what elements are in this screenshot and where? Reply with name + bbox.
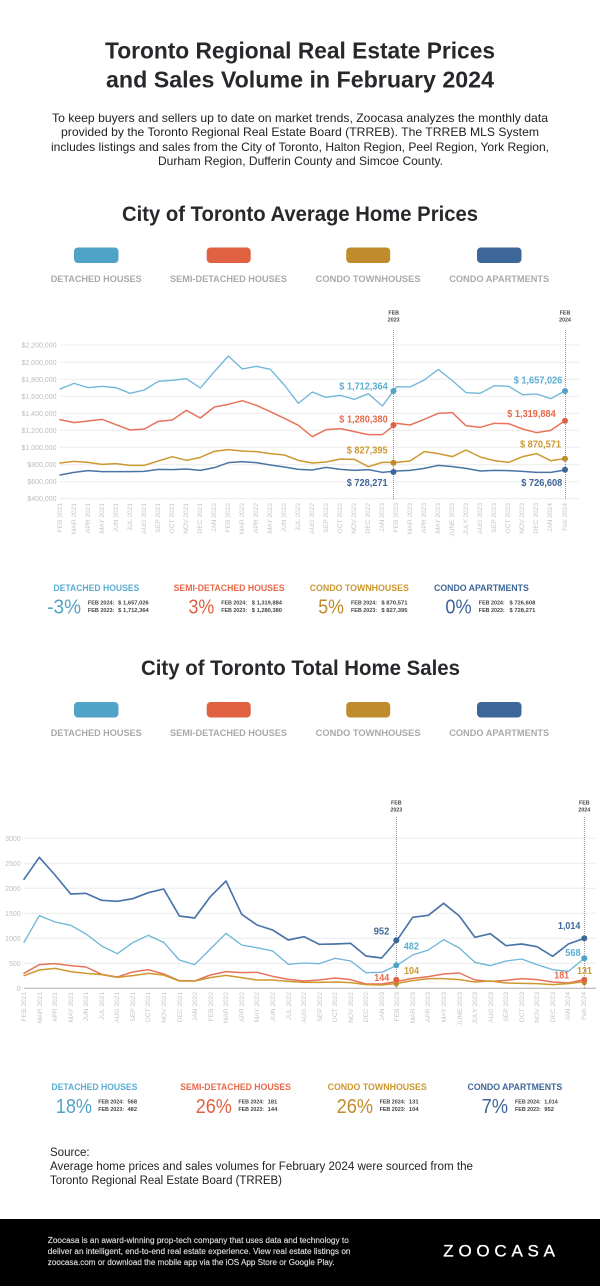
reference markers: FEB bbox=[391, 800, 402, 806]
stat: detached houses: 482 bbox=[128, 1107, 137, 1113]
stat: detached houses: -3% bbox=[47, 597, 81, 619]
stat: detached houses bbox=[51, 1082, 137, 1118]
value labels: $ 728,271 bbox=[347, 478, 388, 489]
x axis labels: JUN 2022 bbox=[281, 503, 288, 532]
stat: condo apartments: $ 726,608 bbox=[510, 600, 535, 606]
x axis labels: DEC 2021 bbox=[197, 503, 204, 533]
x axis labels: SEP 2022 bbox=[323, 503, 330, 533]
heading: average home prices: City of Toronto Average Home Prices bbox=[122, 203, 478, 226]
y axis labels: $800,000 bbox=[27, 462, 57, 469]
x axis labels: APR 2022 bbox=[239, 992, 246, 1022]
stat: semi-detached houses: SEMI-DETACHED HOUSES bbox=[174, 583, 285, 594]
x axis labels bbox=[57, 503, 569, 537]
legend: total home sales bbox=[51, 702, 549, 739]
reference markers: FEB bbox=[579, 800, 590, 806]
legend: average home prices: CONDO APARTMENTS bbox=[449, 274, 549, 285]
x axis labels: MAR 2023 bbox=[410, 992, 417, 1023]
data lines bbox=[24, 857, 584, 985]
title: and Sales Volume in February 2024 bbox=[106, 66, 494, 92]
y axis labels: 2000 bbox=[5, 886, 21, 893]
intro paragraph bbox=[51, 111, 549, 168]
x axis labels: OCT 2023 bbox=[505, 503, 512, 533]
x axis labels: NOV 2021 bbox=[183, 503, 190, 534]
legend: total home sales: CONDO TOWNHOUSES bbox=[316, 728, 421, 739]
stat: condo apartments: CONDO APARTMENTS bbox=[434, 583, 529, 594]
stat: detached houses: 18% bbox=[56, 1096, 92, 1118]
x axis labels: JAN 2022 bbox=[211, 503, 218, 532]
stat: condo townhouses: $ 870,571 bbox=[381, 600, 408, 606]
x axis labels: APR 2023 bbox=[425, 992, 432, 1022]
stat: semi-detached houses: $ 1,319,884 bbox=[252, 600, 283, 606]
x axis labels: JAN 2022 bbox=[192, 992, 199, 1021]
footer text: deliver an intelligent, end-to-end real estate experience. View real estate listings on bbox=[48, 1247, 351, 1256]
stat: condo townhouses: $ 827,395 bbox=[381, 608, 408, 614]
x axis labels: SEP 2023 bbox=[491, 503, 498, 533]
reference markers bbox=[390, 800, 590, 988]
x axis labels: SEP 2021 bbox=[130, 992, 137, 1022]
stat: condo townhouses bbox=[328, 1082, 427, 1118]
reference markers: 2024 bbox=[578, 808, 590, 814]
intro paragraph: provided by the Toronto Regional Real Estate Board (TRREB). The TRREB MLS System bbox=[61, 125, 539, 139]
value labels: $ 1,657,026 bbox=[514, 375, 563, 386]
footer text: Zoocasa is an award-winning prop-tech company that uses data and technology to bbox=[48, 1236, 349, 1245]
stat: semi-detached houses: 144 bbox=[268, 1107, 278, 1113]
y axis labels: $1,600,000 bbox=[21, 394, 57, 401]
x axis labels: NOV 2023 bbox=[519, 503, 526, 534]
legend: total home sales: CONDO APARTMENTS bbox=[449, 728, 549, 739]
x axis labels: MAY 2022 bbox=[254, 992, 261, 1022]
x axis labels: DEC 2021 bbox=[177, 992, 184, 1022]
y axis labels: $1,800,000 bbox=[21, 377, 57, 384]
x axis labels: FEB 2022 bbox=[208, 992, 215, 1021]
x axis labels: DEC 2023 bbox=[533, 503, 540, 533]
x axis labels bbox=[21, 992, 588, 1026]
data points bbox=[393, 935, 587, 987]
stat: condo apartments: FEB 2023: bbox=[479, 608, 505, 614]
value labels: $ 726,608 bbox=[521, 478, 563, 489]
x axis labels: NOV 2023 bbox=[534, 992, 541, 1023]
stat: semi-detached houses: FEB 2023: bbox=[238, 1107, 264, 1113]
intro paragraph: To keep buyers and sellers up to date on market trends, Zoocasa analyzes the monthly data bbox=[52, 111, 548, 125]
x axis labels: FEB 2021 bbox=[57, 503, 64, 532]
x axis labels: AUG 2022 bbox=[309, 503, 316, 534]
value labels: 144 bbox=[374, 973, 390, 984]
value labels: $ 827,395 bbox=[347, 445, 388, 456]
x axis labels: OCT 2021 bbox=[145, 992, 152, 1022]
stat: semi-detached houses: 26% bbox=[196, 1096, 232, 1118]
footer bbox=[0, 1219, 600, 1286]
stat: detached houses: FEB 2023: bbox=[88, 608, 115, 614]
stat: detached houses: DETACHED HOUSES bbox=[53, 583, 139, 594]
y axis labels: $1,400,000 bbox=[21, 411, 57, 418]
x axis labels: APR 2023 bbox=[421, 503, 428, 533]
intro paragraph: includes listings and sales from the City of Toronto, Halton Region, Peel Region, York Region, bbox=[51, 140, 549, 154]
value labels: 181 bbox=[554, 971, 569, 982]
stat: semi-detached houses: SEMI-DETACHED HOUSES bbox=[180, 1082, 291, 1093]
y axis labels: 0 bbox=[17, 986, 21, 993]
value labels: 568 bbox=[565, 948, 581, 959]
x axis labels: NOV 2022 bbox=[351, 503, 358, 534]
x axis labels: MAR 2022 bbox=[239, 503, 246, 534]
x axis labels: DEC 2022 bbox=[363, 992, 370, 1022]
stat: detached houses: $ 1,657,026 bbox=[118, 600, 149, 606]
stat: condo townhouses: 131 bbox=[409, 1100, 419, 1106]
x axis labels: FEB 2021 bbox=[21, 992, 28, 1021]
stat: condo townhouses: 26% bbox=[337, 1096, 373, 1118]
x axis labels: APR 2022 bbox=[253, 503, 260, 533]
x axis labels: MAR 2021 bbox=[37, 992, 44, 1023]
x axis labels: JUL 2021 bbox=[127, 503, 134, 531]
x axis labels: JUNE 2023 bbox=[449, 503, 456, 537]
x axis labels: JUL 2022 bbox=[295, 503, 302, 531]
y axis labels: $400,000 bbox=[27, 496, 57, 503]
y axis labels: 500 bbox=[9, 961, 21, 968]
x axis labels: OCT 2022 bbox=[337, 503, 344, 533]
footer text: zoocasa.com or download the mobile app via the iOS App Store or Google Play. bbox=[48, 1258, 335, 1267]
data lines bbox=[60, 356, 565, 475]
x axis labels: AUG 2023 bbox=[488, 992, 495, 1023]
y axis labels bbox=[5, 836, 21, 993]
x axis labels: SEP 2021 bbox=[155, 503, 162, 533]
stat: condo apartments bbox=[434, 583, 535, 619]
value labels: $ 1,280,380 bbox=[339, 415, 388, 426]
x axis labels: JULY 2023 bbox=[463, 503, 470, 535]
stats: total home sales bbox=[51, 1082, 562, 1118]
stat: condo apartments: FEB 2024: bbox=[479, 600, 505, 606]
value labels: 131 bbox=[577, 966, 592, 977]
x axis labels: APR 2021 bbox=[52, 992, 59, 1022]
x axis labels: AUG 2023 bbox=[477, 503, 484, 534]
x axis labels: JUNE 2023 bbox=[457, 992, 464, 1026]
stat: condo townhouses bbox=[310, 583, 409, 619]
stat: semi-detached houses: 3% bbox=[188, 597, 214, 619]
x axis labels: SEP 2022 bbox=[317, 992, 324, 1022]
line chart: average home prices bbox=[21, 310, 579, 537]
value labels: $ 1,319,884 bbox=[507, 409, 556, 420]
y axis labels: $1,000,000 bbox=[21, 445, 57, 452]
y axis labels: $2,200,000 bbox=[21, 342, 57, 350]
x axis labels: OCT 2023 bbox=[519, 992, 526, 1022]
reference markers: 2024 bbox=[559, 318, 571, 324]
data points bbox=[390, 388, 568, 475]
x axis labels: AUG 2022 bbox=[301, 992, 308, 1023]
stat: detached houses: FEB 2023: bbox=[98, 1107, 124, 1113]
value labels bbox=[374, 921, 592, 984]
x axis labels: MAY 2022 bbox=[267, 503, 274, 533]
stat: condo townhouses: 5% bbox=[318, 597, 344, 619]
stat: detached houses: FEB 2024: bbox=[98, 1100, 124, 1106]
stat: condo apartments bbox=[468, 1082, 562, 1118]
x axis labels: JAN 2024 bbox=[547, 503, 554, 532]
x axis labels: JAN 2024 bbox=[565, 992, 572, 1021]
reference markers: FEB bbox=[388, 310, 399, 316]
source note: Toronto Regional Real Estate Board (TRREB) bbox=[50, 1175, 282, 1187]
stat: condo townhouses: 104 bbox=[409, 1107, 420, 1113]
stat: condo townhouses: FEB 2024: bbox=[351, 600, 377, 606]
x axis labels: Feb 2024 bbox=[562, 503, 569, 531]
stats: average home prices bbox=[47, 583, 535, 619]
stat: condo townhouses: FEB 2024: bbox=[380, 1100, 406, 1106]
intro paragraph: Durham Region, Dufferin County and Simcoe County. bbox=[158, 154, 443, 168]
value labels: 482 bbox=[404, 941, 419, 952]
x axis labels: JUN 2021 bbox=[113, 503, 120, 532]
reference markers: FEB bbox=[560, 310, 570, 316]
stat: semi-detached houses: $ 1,280,380 bbox=[252, 608, 282, 614]
legend: average home prices: DETACHED HOUSES bbox=[51, 274, 142, 285]
x axis labels: MAY 2023 bbox=[441, 992, 448, 1022]
stat: detached houses: DETACHED HOUSES bbox=[51, 1082, 137, 1093]
x axis labels: JAN 2023 bbox=[379, 992, 386, 1021]
stat: condo apartments: $ 728,271 bbox=[510, 608, 535, 614]
stat: semi-detached houses: FEB 2024: bbox=[238, 1100, 264, 1106]
x axis labels: JAN 2023 bbox=[379, 503, 386, 532]
x axis labels: FEB 2023 bbox=[393, 503, 400, 532]
y axis labels: $2,000,000 bbox=[21, 360, 57, 367]
stat: semi-detached houses: 181 bbox=[268, 1100, 277, 1106]
stat: semi-detached houses: FEB 2024: bbox=[221, 600, 247, 606]
value labels: 952 bbox=[374, 927, 390, 938]
stat: condo townhouses: FEB 2023: bbox=[380, 1107, 406, 1113]
x axis labels: MAY 2021 bbox=[99, 503, 106, 533]
y axis labels: 2500 bbox=[5, 861, 21, 868]
stat: condo townhouses: CONDO TOWNHOUSES bbox=[310, 583, 409, 594]
legend: total home sales: SEMI-DETACHED HOUSES bbox=[170, 728, 287, 739]
x axis labels: SEP 2023 bbox=[503, 992, 510, 1022]
stat: detached houses: FEB 2024: bbox=[88, 600, 115, 606]
x axis labels: DEC 2022 bbox=[365, 503, 372, 533]
value labels: $ 1,712,364 bbox=[339, 381, 388, 392]
legend: average home prices: SEMI-DETACHED HOUSES bbox=[170, 274, 287, 285]
stat: semi-detached houses bbox=[180, 1082, 291, 1118]
x axis labels: OCT 2022 bbox=[332, 992, 339, 1022]
legend: average home prices bbox=[51, 248, 549, 285]
x axis labels: MAY 2021 bbox=[68, 992, 75, 1022]
stat: detached houses: 568 bbox=[128, 1100, 137, 1106]
stat: semi-detached houses: FEB 2023: bbox=[221, 608, 247, 614]
stat: condo apartments: FEB 2024: bbox=[515, 1100, 541, 1106]
value labels: 104 bbox=[404, 966, 419, 977]
stat: condo apartments: FEB 2023: bbox=[515, 1107, 541, 1113]
x axis labels: JUN 2022 bbox=[270, 992, 277, 1021]
x axis labels: DEC 2023 bbox=[550, 992, 557, 1022]
x axis labels: MAR 2023 bbox=[407, 503, 414, 534]
stat: detached houses bbox=[47, 583, 150, 619]
x axis labels: NOV 2022 bbox=[348, 992, 355, 1023]
stat: semi-detached houses bbox=[174, 583, 285, 619]
x axis labels: FEB 2023 bbox=[394, 992, 401, 1021]
line chart: total home sales bbox=[5, 800, 596, 1026]
y axis labels: 1000 bbox=[5, 936, 21, 943]
stat: detached houses: $ 1,712,364 bbox=[118, 608, 150, 614]
stat: condo townhouses: CONDO TOWNHOUSES bbox=[328, 1082, 427, 1093]
reference markers: 2023 bbox=[390, 808, 402, 814]
y axis labels: 1500 bbox=[5, 911, 21, 918]
x axis labels: Feb 2024 bbox=[581, 992, 588, 1020]
x axis labels: MAY 2023 bbox=[435, 503, 442, 533]
logo: ZOOCASA bbox=[443, 1242, 556, 1261]
value labels bbox=[339, 375, 563, 489]
x axis labels: OCT 2021 bbox=[169, 503, 176, 533]
y axis labels: 3000 bbox=[5, 836, 21, 843]
stat: condo apartments: 7% bbox=[482, 1096, 508, 1118]
stat: condo apartments: 0% bbox=[445, 597, 472, 619]
heading: total home sales: City of Toronto Total Home Sales bbox=[141, 657, 460, 680]
source note: Source: bbox=[50, 1147, 90, 1159]
y axis labels: $600,000 bbox=[27, 479, 57, 486]
x axis labels: JUL 2022 bbox=[286, 992, 293, 1020]
x axis labels: JULY 2023 bbox=[472, 992, 479, 1024]
x axis labels: JUL 2021 bbox=[99, 992, 106, 1020]
stat: condo apartments: CONDO APARTMENTS bbox=[468, 1082, 562, 1093]
title bbox=[105, 37, 495, 92]
title: Toronto Regional Real Estate Prices bbox=[105, 37, 495, 63]
stat: condo apartments: 952 bbox=[544, 1107, 554, 1113]
x axis labels: JUN 2021 bbox=[83, 992, 90, 1021]
reference markers bbox=[388, 310, 571, 499]
legend: total home sales: DETACHED HOUSES bbox=[51, 728, 142, 739]
value labels: $ 870,571 bbox=[520, 440, 561, 451]
x axis labels: FEB 2022 bbox=[225, 503, 232, 532]
y axis labels: $1,200,000 bbox=[21, 428, 57, 435]
source note bbox=[50, 1147, 473, 1187]
y axis labels bbox=[21, 342, 57, 503]
value labels: 1,014 bbox=[558, 921, 581, 932]
x axis labels: MAR 2022 bbox=[223, 992, 230, 1023]
x axis labels: AUG 2021 bbox=[114, 992, 121, 1023]
x axis labels: MAR 2021 bbox=[71, 503, 78, 534]
footer text bbox=[48, 1236, 351, 1267]
reference markers: 2023 bbox=[388, 318, 400, 324]
x axis labels: APR 2021 bbox=[85, 503, 92, 533]
stat: condo townhouses: FEB 2023: bbox=[351, 608, 377, 614]
x axis labels: NOV 2021 bbox=[161, 992, 168, 1023]
legend: average home prices: CONDO TOWNHOUSES bbox=[316, 274, 421, 285]
source note: Average home prices and sales volumes for February 2024 were sourced from the bbox=[50, 1161, 473, 1173]
x axis labels: AUG 2021 bbox=[141, 503, 148, 534]
stat: condo apartments: 1,014 bbox=[544, 1100, 559, 1106]
